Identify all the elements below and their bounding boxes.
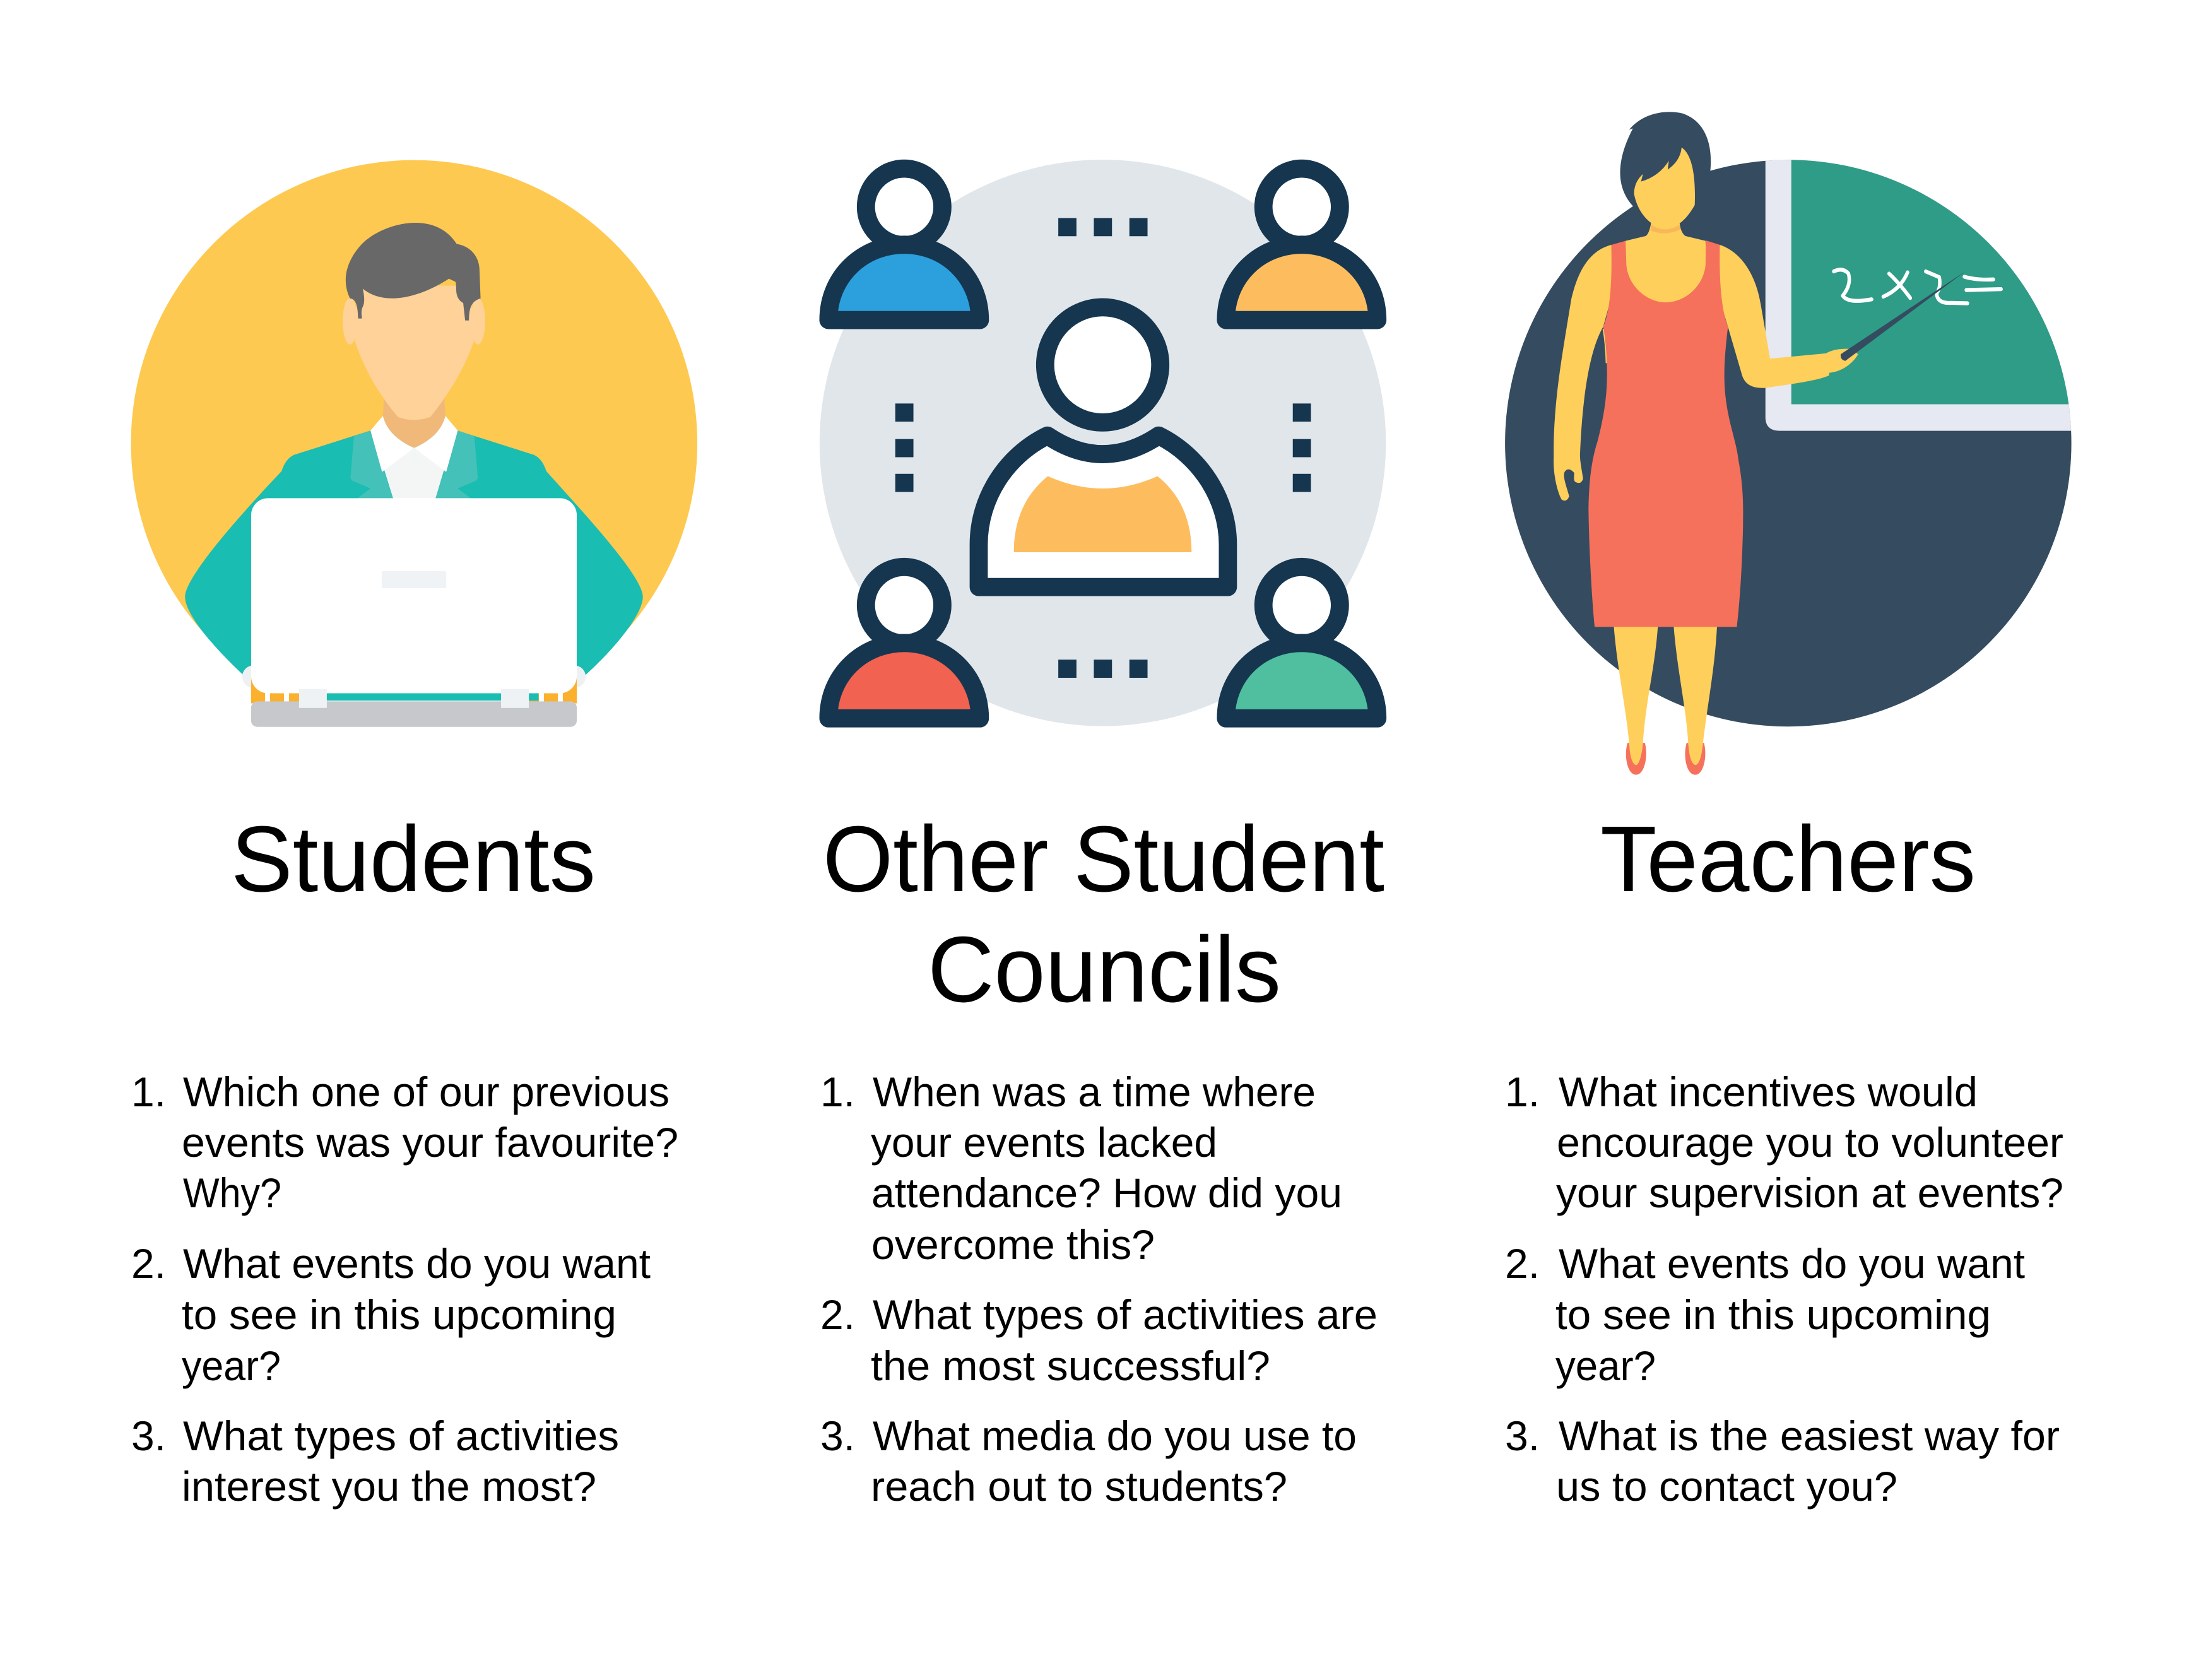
- question list: other student councils: attendance? How did you: [871, 1169, 1342, 1216]
- question list: teachers: [1505, 1068, 2063, 1510]
- question list: teachers: What is the easiest way for: [1559, 1412, 2060, 1459]
- question list: other student councils: What types of activities are: [873, 1291, 1378, 1338]
- question list: other student councils: 3.: [820, 1412, 855, 1459]
- heading: Other Student Councils: Councils: [928, 918, 1281, 1022]
- infographic canvas: [131, 112, 2072, 1510]
- question list: students: What types of activities: [183, 1412, 619, 1459]
- question list: students: to see in this upcoming: [182, 1291, 617, 1338]
- question list: other student councils: overcome this?: [871, 1221, 1155, 1268]
- question list: other student councils: [820, 1068, 1378, 1510]
- question list: teachers: encourage you to volunteer: [1557, 1119, 2063, 1166]
- heading: Students: Students: [231, 807, 596, 911]
- question list: students: interest you the most?: [182, 1463, 596, 1510]
- question list: other student councils: 1.: [820, 1068, 855, 1115]
- question list: teachers: What events do you want: [1559, 1240, 2025, 1287]
- icon: teacher at chalkboard: [1505, 112, 2072, 775]
- question list: other student councils: When was a time where: [873, 1068, 1316, 1115]
- question list: students: [131, 1068, 678, 1510]
- question list: other student councils: your events lacked: [871, 1119, 1217, 1166]
- question list: teachers: your supervision at events?: [1556, 1169, 2063, 1216]
- panel: teachers: [1505, 112, 2072, 1510]
- heading: Other Student Councils: Other Student: [823, 807, 1384, 911]
- panel: other student councils: [820, 160, 1386, 1510]
- heading: Other Student Councils: [823, 807, 1384, 1022]
- question list: other student councils: the most successful?: [871, 1342, 1270, 1389]
- question list: students: Which one of our previous: [183, 1068, 670, 1115]
- question list: students: Why?: [183, 1169, 281, 1216]
- question list: other student councils: 2.: [820, 1291, 855, 1338]
- question list: other student councils: reach out to students?: [871, 1463, 1287, 1510]
- question list: students: What events do you want: [183, 1240, 651, 1287]
- question list: students: events was your favourite?: [182, 1119, 678, 1166]
- question list: teachers: What incentives would: [1559, 1068, 1978, 1115]
- question list: students: 3.: [131, 1412, 166, 1459]
- question list: students: 2.: [131, 1240, 166, 1287]
- panel: students: [131, 160, 697, 1510]
- question list: other student councils: What media do you use to: [873, 1412, 1357, 1459]
- heading: Teachers: Teachers: [1600, 807, 1976, 911]
- question list: teachers: 3.: [1505, 1412, 1540, 1459]
- question list: teachers: us to contact you?: [1556, 1463, 1897, 1510]
- question list: teachers: year?: [1555, 1342, 1656, 1389]
- icon: student with laptop: [131, 160, 697, 727]
- question list: students: year?: [182, 1342, 281, 1389]
- question list: students: 1.: [131, 1068, 166, 1115]
- icon: network of people: [820, 160, 1386, 726]
- question list: teachers: to see in this upcoming: [1555, 1291, 1991, 1338]
- question list: teachers: 2.: [1505, 1240, 1540, 1287]
- question list: teachers: 1.: [1505, 1068, 1540, 1115]
